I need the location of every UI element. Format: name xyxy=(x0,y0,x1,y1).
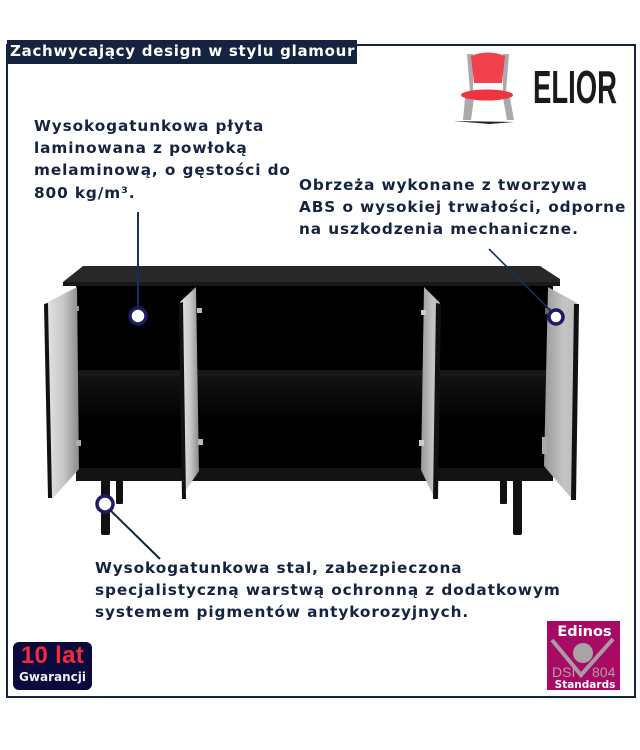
text: steel xyxy=(95,559,561,621)
carcass xyxy=(76,284,553,470)
text: edges: na uszkodzenia mechaniczne. xyxy=(299,220,579,238)
top xyxy=(63,266,560,286)
text: board material: Wysokogatunkowa płyta xyxy=(34,117,264,135)
badge caption: Gwarancji xyxy=(19,670,86,684)
door: far right xyxy=(542,287,579,500)
badge: Edinos standards: Edinos xyxy=(557,624,612,640)
door: inner left xyxy=(179,287,203,499)
door: far left xyxy=(44,287,81,498)
text: steel: systemem pigmentów antykorozyjnych. xyxy=(95,603,469,621)
shelf xyxy=(78,376,548,420)
text: board material: melaminową, o gęstości do xyxy=(34,161,291,179)
door: inner right xyxy=(419,287,441,499)
badge: Edinos standards: 804 xyxy=(592,664,616,680)
badge: 10 years warranty xyxy=(13,642,92,690)
back legs xyxy=(116,470,123,504)
badge number: 10 lat xyxy=(21,642,84,669)
badge: Edinos standards: DSI xyxy=(552,664,575,680)
text: board material: 800 kg/m³. xyxy=(34,184,135,202)
text: board material: laminowana z powłoką xyxy=(34,139,248,157)
title: Zachwycający design w stylu glamour xyxy=(10,42,355,60)
text: edges xyxy=(299,176,626,238)
text: steel: specjalistyczną warstwą ochronną z dodatkowym xyxy=(95,581,561,599)
text: edges: Obrzeża wykonane z tworzywa xyxy=(299,176,588,194)
front legs xyxy=(101,470,110,535)
text: steel: Wysokogatunkowa stal, zabezpieczona xyxy=(95,559,462,577)
text: edges: ABS o wysokiej trwałości, odporne xyxy=(299,198,626,216)
text: board material xyxy=(34,117,291,202)
badge: Edinos standards: Standards xyxy=(555,679,615,691)
